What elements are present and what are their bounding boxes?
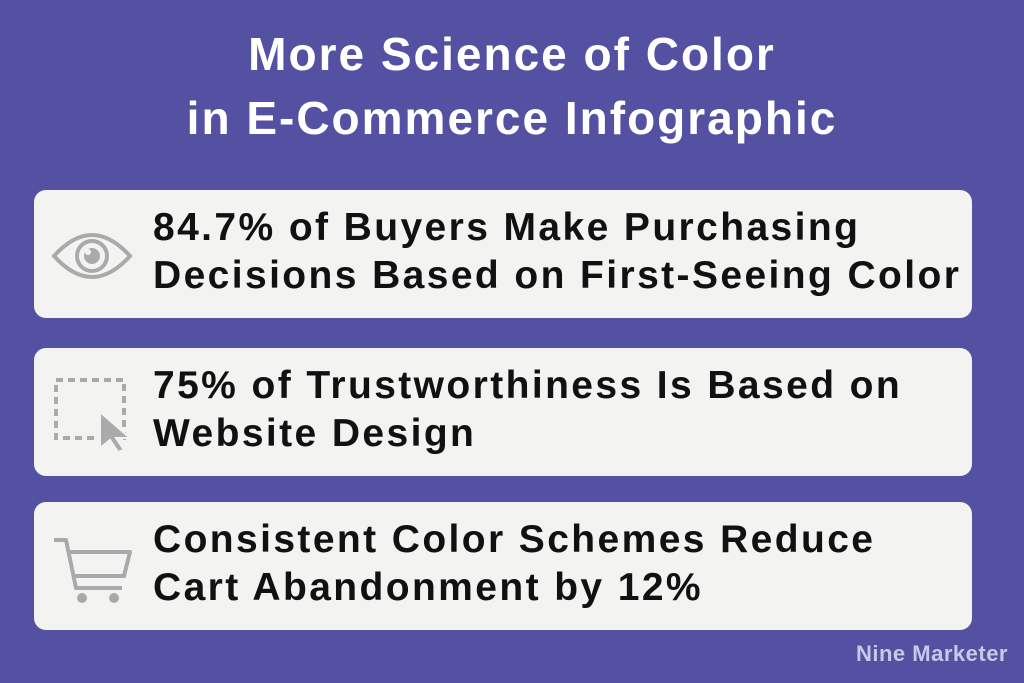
text: trust: 75% of Trustworthiness Is Based on: [153, 364, 902, 407]
icon: selection cursor: [54, 378, 128, 451]
text: cart: Cart Abandonment by 12%: [153, 566, 703, 609]
title: [187, 28, 837, 144]
panel: buyers: [34, 190, 972, 318]
panel: trust: [34, 348, 972, 476]
icon: cart: [54, 538, 132, 603]
panel: cart: [34, 502, 972, 630]
text: cart: [153, 518, 875, 609]
title: in E-Commerce Infographic: [187, 92, 837, 144]
brand: Nine Marketer: [856, 641, 1008, 666]
text: trust: [153, 364, 902, 455]
text: cart: Consistent Color Schemes Reduce: [153, 518, 875, 561]
text: buyers: Decisions Based on First-Seeing Color: [153, 254, 961, 297]
icon: eye: [52, 233, 132, 279]
text: trust: Website Design: [153, 412, 476, 455]
text: buyers: [153, 206, 961, 297]
text: buyers: 84.7% of Buyers Make Purchasing: [153, 206, 860, 249]
title: More Science of Color: [248, 28, 776, 80]
